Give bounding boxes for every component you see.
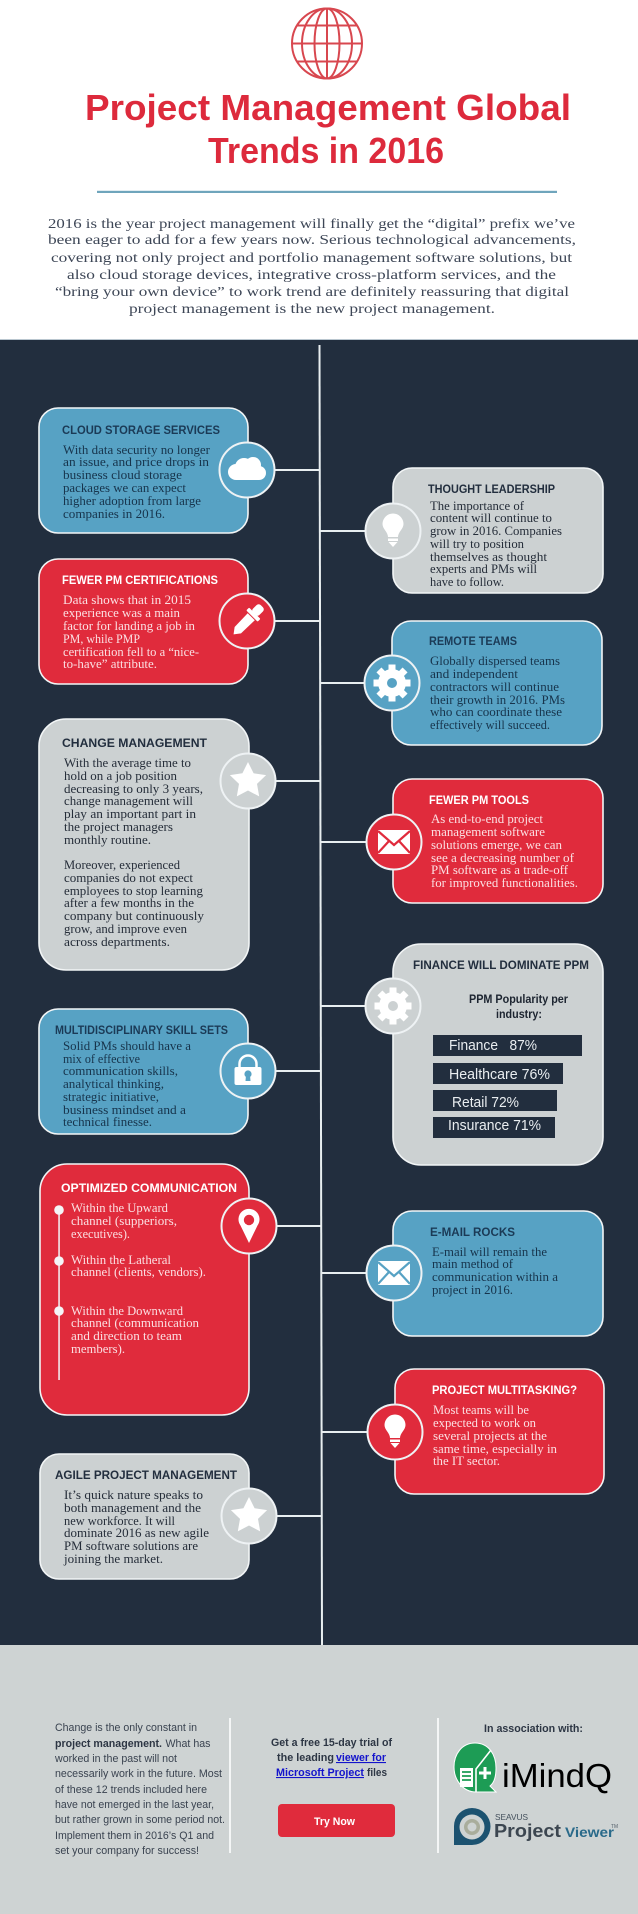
footer text: free trial offer: Get a free 15-day trial of <box>271 1737 392 1749</box>
body text: their growth in 2016. PMs <box>430 693 565 707</box>
body text: dominate 2016 as new agile <box>64 1526 209 1540</box>
footer text: closing message: Change is the only constant in <box>55 1722 197 1734</box>
body text: channel (communication <box>71 1316 200 1330</box>
bar chart: ppm popularity: Retail 72% <box>452 1094 519 1111</box>
body text: main method of <box>432 1257 514 1271</box>
panel: fewer pm certifications <box>39 559 274 684</box>
panel: finance will dominate ppm <box>366 944 603 1165</box>
icon: light bulb <box>366 504 420 558</box>
intro text: been eager to add for a few years now. Serious technological advancements, <box>48 233 576 248</box>
body text: themselves as thought <box>430 550 548 564</box>
icon: envelope <box>366 814 422 870</box>
body text: business mindset and a <box>63 1103 186 1117</box>
chart subtitle: PPM Popularity per <box>469 994 568 1006</box>
footer text: free trial offer <box>271 1737 392 1779</box>
intro text: “bring your own device” to work trend are definitely reassuring that digital <box>55 285 569 300</box>
body text: both management and the <box>64 1501 201 1515</box>
body text: certification fell to a “nice- <box>63 645 199 659</box>
footer text: closing message: of these 12 trends included here <box>55 1784 207 1796</box>
body text <box>71 1201 206 1356</box>
logo: iMindQ <box>454 1743 612 1794</box>
body text: have to follow. <box>430 575 504 589</box>
body text: content will continue to <box>430 511 552 525</box>
panel: optimized communication <box>40 1164 276 1415</box>
body text: channel (supperiors, <box>71 1214 177 1228</box>
intro text: project management is the new project management. <box>129 302 495 317</box>
body text: after a few months in the <box>64 896 194 910</box>
timeline spine with connectors <box>270 345 370 1645</box>
body text: strategic initiative, <box>63 1090 159 1104</box>
body text <box>63 1488 209 1566</box>
footer text: free trial offer: viewer for <box>336 1752 387 1764</box>
body text: expected to work on <box>433 1416 537 1430</box>
body text: factor for landing a job in <box>63 619 196 633</box>
body text: hold on a job position <box>64 769 178 783</box>
body text: an issue, and price drops in <box>63 455 210 469</box>
body text: packages we can expect <box>63 481 187 495</box>
icon: star <box>220 754 276 808</box>
body text: With data security no longer <box>63 443 211 457</box>
body text: channel (clients, vendors). <box>71 1265 206 1279</box>
logo: Seavus Project Viewer: TM <box>611 1824 618 1830</box>
footer text: closing message: worked in the past will not <box>54 1753 177 1765</box>
body text: effectively will succeed. <box>430 718 550 732</box>
body text: As end-to-end project <box>431 812 544 826</box>
logo: Seavus Project Viewer <box>454 1808 618 1845</box>
panel: cloud storage services <box>39 408 274 533</box>
body text: technical finesse. <box>63 1115 152 1129</box>
icon: cloud <box>220 442 274 498</box>
icon: star <box>222 1488 276 1544</box>
body text: same time, especially in <box>433 1442 558 1456</box>
body text: grow, and improve even <box>64 922 188 936</box>
chart subtitle: industry: <box>496 1009 542 1021</box>
body text: play an important part in <box>64 807 197 821</box>
body text: will try to position <box>430 537 525 551</box>
body text: to-have” attribute. <box>63 657 157 671</box>
body text: new workforce. It will <box>64 1514 176 1528</box>
panel: thought leadership <box>366 468 603 593</box>
body text: management software <box>431 825 545 839</box>
heading: MULTIDISCIPLINARY SKILL SETS <box>55 1023 228 1037</box>
body text: It’s quick nature speaks to <box>64 1488 203 1502</box>
icon: dropper <box>220 594 274 648</box>
body text <box>63 1039 191 1129</box>
footer text: closing message: set your company for success! <box>55 1845 199 1857</box>
heading: FEWER PM TOOLS <box>429 793 529 807</box>
intro text <box>48 217 576 317</box>
heading: FEWER PM CERTIFICATIONS <box>62 573 218 587</box>
chart subtitle <box>469 994 568 1021</box>
body text <box>63 593 199 671</box>
body text: With the average time to <box>64 756 191 770</box>
panel: e-mail rocks <box>366 1211 603 1336</box>
body text: companies do not expect <box>64 871 194 885</box>
body text <box>430 499 562 589</box>
footer text: closing message: project management. <box>55 1738 162 1750</box>
panel: project multitasking <box>368 1369 604 1494</box>
body text <box>431 812 578 890</box>
body text <box>64 756 205 949</box>
logo: Seavus Project Viewer: Viewer <box>565 1824 615 1840</box>
body text: mix of effective <box>63 1052 140 1066</box>
body text: and direction to team <box>71 1329 182 1343</box>
intro text: covering not only project and portfolio management software solutions, but <box>51 251 572 266</box>
body text: experts and PMs will <box>430 562 538 576</box>
body text: joining the market. <box>63 1552 163 1566</box>
body text: companies in 2016. <box>63 507 165 521</box>
icon: padlock <box>220 1044 276 1098</box>
panel: remote teams <box>364 621 602 745</box>
body text: see a decreasing number of <box>431 851 575 865</box>
title <box>85 87 571 171</box>
heading: PROJECT MULTITASKING? <box>432 1383 577 1397</box>
body text: higher adoption from large <box>63 494 201 508</box>
icon: light bulb <box>368 1404 422 1460</box>
body text: Within the Upward <box>71 1201 169 1215</box>
body text: change management will <box>64 794 194 808</box>
body text: project in 2016. <box>432 1283 513 1297</box>
footer text: free trial offer: Microsoft Project <box>276 1767 364 1779</box>
body text: E-mail will remain the <box>432 1245 547 1259</box>
body text: Within the Downward <box>71 1304 184 1318</box>
body text: solutions emerge, we can <box>431 838 563 852</box>
body text: Moreover, experienced <box>64 858 181 872</box>
button: try now <box>278 1804 395 1837</box>
heading: OPTIMIZED COMMUNICATION <box>61 1181 237 1195</box>
bar chart: ppm popularity: Insurance 71% <box>448 1117 541 1134</box>
heading: CHANGE MANAGEMENT <box>62 736 208 750</box>
body text: business cloud storage <box>63 468 182 482</box>
body text: Within the Latheral <box>71 1253 172 1267</box>
icon: gear <box>366 978 420 1034</box>
body text: PM, while PMP <box>63 632 140 646</box>
icon: location pin <box>222 1198 276 1254</box>
heading: E-MAIL ROCKS <box>430 1225 515 1239</box>
body text: executives). <box>71 1227 130 1241</box>
footer text: closing message: Implement them in 2016’s Q1 and <box>55 1830 214 1842</box>
heading: CLOUD STORAGE SERVICES <box>62 423 220 437</box>
body text: who can coordinate these <box>430 705 562 719</box>
body text: the IT sector. <box>433 1454 500 1468</box>
icon: gear <box>364 656 420 710</box>
footer text: closing message: have not emerged in the last year, <box>55 1799 214 1811</box>
body text: across departments. <box>64 935 170 949</box>
body text: members). <box>71 1342 125 1356</box>
button: try now: Try Now <box>314 1816 355 1828</box>
body text: and independent <box>430 667 519 681</box>
body text: Globally dispersed teams <box>430 654 560 668</box>
body text: communication skills, <box>63 1064 178 1078</box>
body text: for improved functionalities. <box>431 876 578 890</box>
heading: THOUGHT LEADERSHIP <box>428 482 555 496</box>
icon: envelope <box>366 1246 422 1300</box>
intro text: 2016 is the year project management will finally get the “digital” prefix we’ve <box>48 217 575 232</box>
body text: monthly routine. <box>64 833 151 847</box>
body text: PM software as a trade-off <box>431 863 569 877</box>
heading: AGILE PROJECT MANAGEMENT <box>55 1468 238 1482</box>
logo: iMindQ: iMindQ <box>502 1757 612 1794</box>
body text: experience was a main <box>63 606 181 620</box>
panel: dark timeline background <box>0 340 638 1646</box>
panel: agile project management <box>40 1454 276 1579</box>
body text: employees to stop learning <box>64 884 204 898</box>
footer text: closing message: but rather grown in some period not. <box>55 1814 225 1826</box>
body text: The importance of <box>430 499 525 513</box>
panel: change management <box>39 719 276 970</box>
body text: Most teams will be <box>433 1403 529 1417</box>
body text <box>430 654 565 732</box>
body text: contractors will continue <box>430 680 559 694</box>
heading: REMOTE TEAMS <box>429 634 517 648</box>
panel: multidisciplinary skill sets <box>39 1009 276 1134</box>
title: Project Management Global <box>85 87 571 128</box>
body text: communication within a <box>432 1270 558 1284</box>
body text: Data shows that in 2015 <box>63 593 191 607</box>
body text: PM software solutions are <box>64 1539 198 1553</box>
logo: Seavus Project Viewer: SEAVUS <box>495 1812 528 1822</box>
heading: FINANCE WILL DOMINATE PPM <box>413 958 589 972</box>
intro text: also cloud storage devices, integrative cross-platform services, and the <box>67 268 556 283</box>
body text: analytical thinking, <box>63 1077 164 1091</box>
bullet timeline <box>54 1205 64 1380</box>
panel: fewer pm tools <box>366 779 603 903</box>
body text: grow in 2016. Companies <box>430 524 562 538</box>
logo: Seavus Project Viewer: Project <box>494 1821 561 1841</box>
footer text: closing message: What has <box>166 1738 211 1750</box>
footer text: free trial offer: files <box>367 1767 387 1779</box>
body text <box>63 443 211 521</box>
bar chart: ppm popularity: Healthcare 76% <box>449 1066 550 1083</box>
bar chart: ppm popularity <box>433 1035 582 1138</box>
footer text: closing message <box>54 1722 225 1857</box>
body text: Solid PMs should have a <box>63 1039 191 1053</box>
body text: the project managers <box>64 820 173 834</box>
body text: decreasing to only 3 years, <box>64 782 203 796</box>
footer heading: in association with: In association with: <box>484 1723 583 1735</box>
bar chart: ppm popularity: Finance 87% <box>449 1037 537 1054</box>
body text: several projects at the <box>433 1429 547 1443</box>
icon: globe <box>292 8 362 78</box>
footer text: closing message: necessarily work in the future. Most <box>55 1768 222 1780</box>
footer text: free trial offer: the leading <box>277 1752 334 1764</box>
title: Trends in 2016 <box>208 130 444 171</box>
body text <box>433 1403 558 1468</box>
body text <box>432 1245 558 1297</box>
panel: footer background <box>0 1645 638 1914</box>
body text: company but continuously <box>64 909 205 923</box>
